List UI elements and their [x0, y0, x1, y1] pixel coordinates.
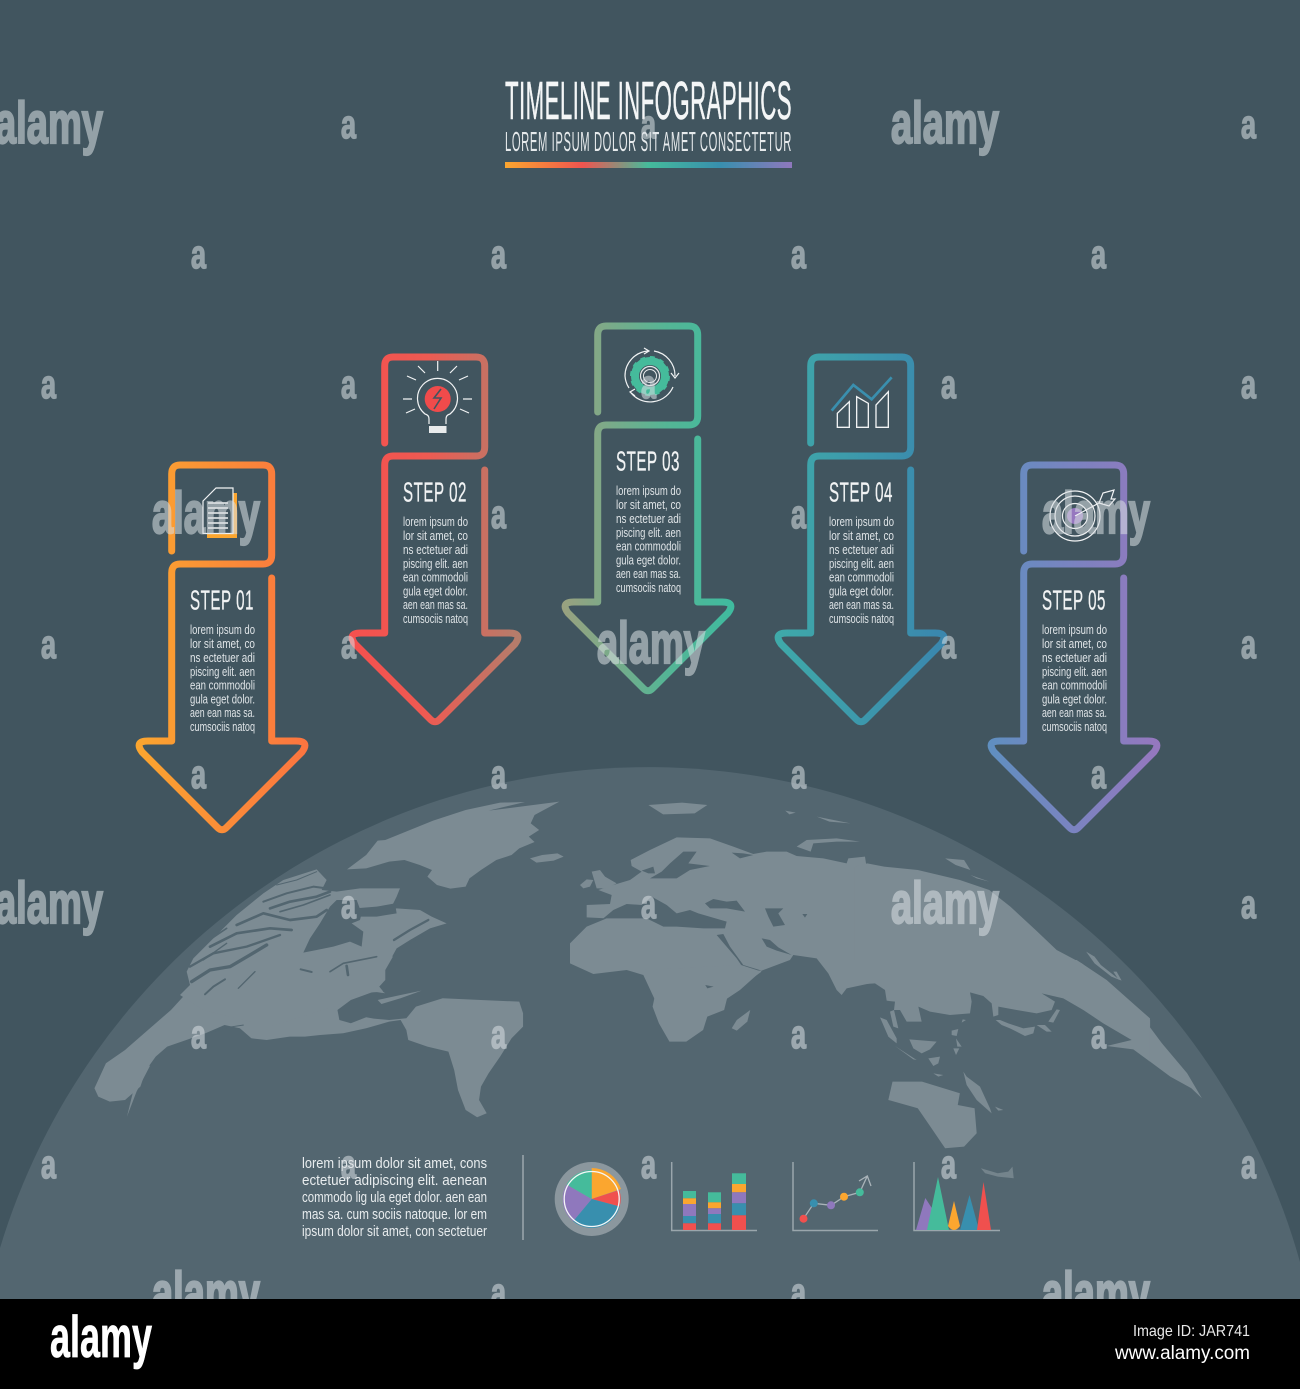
infographic canvas: TIMELINE INFOGRAPHICS [505, 71, 792, 131]
watermarks: a [1241, 623, 1257, 667]
step text: cumsociis natoq [829, 611, 894, 626]
step text: ns ectetuer adi [829, 542, 894, 557]
land: South-East Asia and Australia [850, 960, 1150, 1178]
panel: step 01 [139, 465, 305, 830]
step text: aen ean mas sa. [829, 597, 894, 612]
step text: ean commodoli [829, 570, 894, 584]
watermarks: alamy [597, 611, 705, 676]
step text: gula eget dolor. [616, 552, 681, 568]
step text: lor sit amet, co [829, 528, 894, 543]
land: the Americas [94, 802, 564, 1117]
watermarks: alamy [891, 91, 999, 156]
Hudson Bay and straits [303, 900, 363, 953]
bottom paragraph [302, 1156, 487, 1240]
arrow outline [778, 357, 944, 722]
rainbow underline [505, 162, 792, 168]
step text: gula eget dolor. [1042, 692, 1107, 706]
watermarks: alamy [152, 481, 260, 546]
line chart [793, 1162, 878, 1230]
watermarks: a [491, 493, 507, 537]
panel: step 04 [778, 357, 944, 722]
watermarks: a [791, 1271, 807, 1315]
step heading: STEP 03 [616, 446, 680, 476]
step text: gula eget dolor. [190, 692, 255, 706]
arrow outline [352, 357, 518, 722]
step text: cumsociis natoq [190, 719, 255, 734]
bottom paragraph: ectetuer adipiscing elit. aenean [302, 1173, 487, 1189]
step text: cumsociis natoq [616, 580, 681, 595]
step text: ean commodoli [190, 678, 255, 692]
bottom paragraph: ipsum dolor sit amet, con sectetuer [302, 1224, 487, 1240]
watermarks: a [191, 1013, 207, 1057]
step heading: STEP 01 [190, 584, 254, 616]
watermarks: alamy [891, 871, 999, 936]
step text: aen ean mas sa. [1042, 705, 1107, 720]
step text [829, 514, 894, 626]
step heading: STEP 04 [829, 476, 893, 508]
step text: gula eget dolor. [829, 584, 894, 598]
bottom paragraph: commodo lig ula eget dolor. aen ean [302, 1190, 487, 1206]
panel: step 03 [565, 326, 731, 691]
arrow outline [139, 465, 305, 830]
step text: lor sit amet, co [403, 528, 468, 543]
step text: lor sit amet, co [1042, 636, 1107, 651]
watermarks: a [1241, 103, 1257, 147]
step text: piscing elit. aen [616, 525, 681, 540]
step text: ean commodoli [1042, 678, 1107, 692]
icon: growth chart [832, 377, 892, 427]
arctic channels [190, 872, 428, 994]
area chart [914, 1162, 1000, 1230]
land: Eurasia and Africa [570, 803, 1202, 1098]
step text: ns ectetuer adi [616, 511, 681, 526]
bottom paragraph: lorem ipsum dolor sit amet, cons [302, 1156, 487, 1172]
step text: lorem ipsum do [190, 622, 255, 637]
step text: ns ectetuer adi [1042, 650, 1107, 665]
watermarks: alamy [152, 1261, 260, 1326]
step text: lorem ipsum do [403, 514, 468, 529]
watermarks: a [941, 1143, 957, 1187]
step text: aen ean mas sa. [403, 597, 468, 612]
step text: lorem ipsum do [616, 483, 681, 498]
watermarks: a [1091, 233, 1107, 277]
watermarks: a [191, 233, 207, 277]
website: www.alamy.com [1114, 1343, 1250, 1364]
step text: gula eget dolor. [403, 584, 468, 598]
watermarks: a [41, 623, 57, 667]
watermarks: a [41, 363, 57, 407]
watermarks: a [341, 103, 357, 147]
panel: step 05 [991, 465, 1157, 830]
step text: ean commodoli [403, 570, 468, 584]
watermarks: a [41, 1143, 57, 1187]
arrow outline [565, 326, 731, 691]
watermarks: a [491, 233, 507, 277]
step text: ean commodoli [616, 538, 681, 554]
watermarks: a [941, 623, 957, 667]
watermarks: a [941, 363, 957, 407]
watermarks: a [791, 233, 807, 277]
step text: lorem ipsum do [1042, 622, 1107, 637]
watermarks: a [341, 623, 357, 667]
watermarks: alamy [1042, 481, 1150, 546]
watermarks: a [491, 1013, 507, 1057]
watermarks: a [341, 363, 357, 407]
panel: step 02 [352, 357, 518, 722]
step text: piscing elit. aen [403, 556, 468, 571]
icon: gear [625, 348, 679, 402]
image id: Image ID: JAR741 [1133, 1323, 1250, 1340]
step text: piscing elit. aen [190, 664, 255, 679]
footer logo: alamy [50, 1305, 152, 1370]
icon: target [1050, 490, 1115, 541]
watermarks: a [191, 753, 207, 797]
step text: aen ean mas sa. [616, 566, 681, 581]
bar chart [672, 1162, 757, 1230]
watermarks: a [641, 363, 657, 407]
step text: cumsociis natoq [403, 611, 468, 626]
icon: document [203, 488, 237, 538]
seas [603, 852, 807, 987]
watermarks: a [641, 1143, 657, 1187]
bottom paragraph: mas sa. cum sociis natoque. lor em [302, 1207, 487, 1223]
globe [0, 767, 1300, 1299]
step text [616, 483, 681, 595]
watermarks: a [791, 753, 807, 797]
watermarks: a [341, 1143, 357, 1187]
watermarks: a [1241, 363, 1257, 407]
step text: ns ectetuer adi [403, 542, 468, 557]
watermarks: a [491, 1271, 507, 1315]
step text [403, 514, 468, 626]
step heading: STEP 05 [1042, 584, 1106, 616]
pie chart [555, 1162, 629, 1236]
watermarks: a [341, 883, 357, 927]
step text: cumsociis natoq [1042, 719, 1107, 734]
footer bar [0, 1299, 1300, 1389]
step text [1042, 622, 1107, 734]
watermarks: a [1241, 883, 1257, 927]
step text: lorem ipsum do [829, 514, 894, 529]
step text: lor sit amet, co [616, 497, 681, 512]
step text: lor sit amet, co [190, 636, 255, 651]
step heading: STEP 02 [403, 476, 467, 508]
step text: aen ean mas sa. [190, 705, 255, 720]
step text: piscing elit. aen [1042, 664, 1107, 679]
watermarks: a [1091, 753, 1107, 797]
icon: light bulb [403, 361, 472, 433]
step text [190, 622, 255, 734]
watermarks: a [491, 753, 507, 797]
step text: piscing elit. aen [829, 556, 894, 571]
watermarks: a [1091, 1013, 1107, 1057]
watermarks: a [1241, 1143, 1257, 1187]
watermarks: a [641, 883, 657, 927]
watermarks: a [641, 103, 657, 147]
watermarks: alamy [1042, 1261, 1150, 1326]
title block [505, 71, 792, 168]
arrow outline [991, 465, 1157, 830]
step text: ns ectetuer adi [190, 650, 255, 665]
infographic canvas: LOREM IPSUM DOLOR SIT AMET CONSECTETUR [505, 126, 792, 157]
watermarks: a [791, 493, 807, 537]
watermarks: a [791, 1013, 807, 1057]
